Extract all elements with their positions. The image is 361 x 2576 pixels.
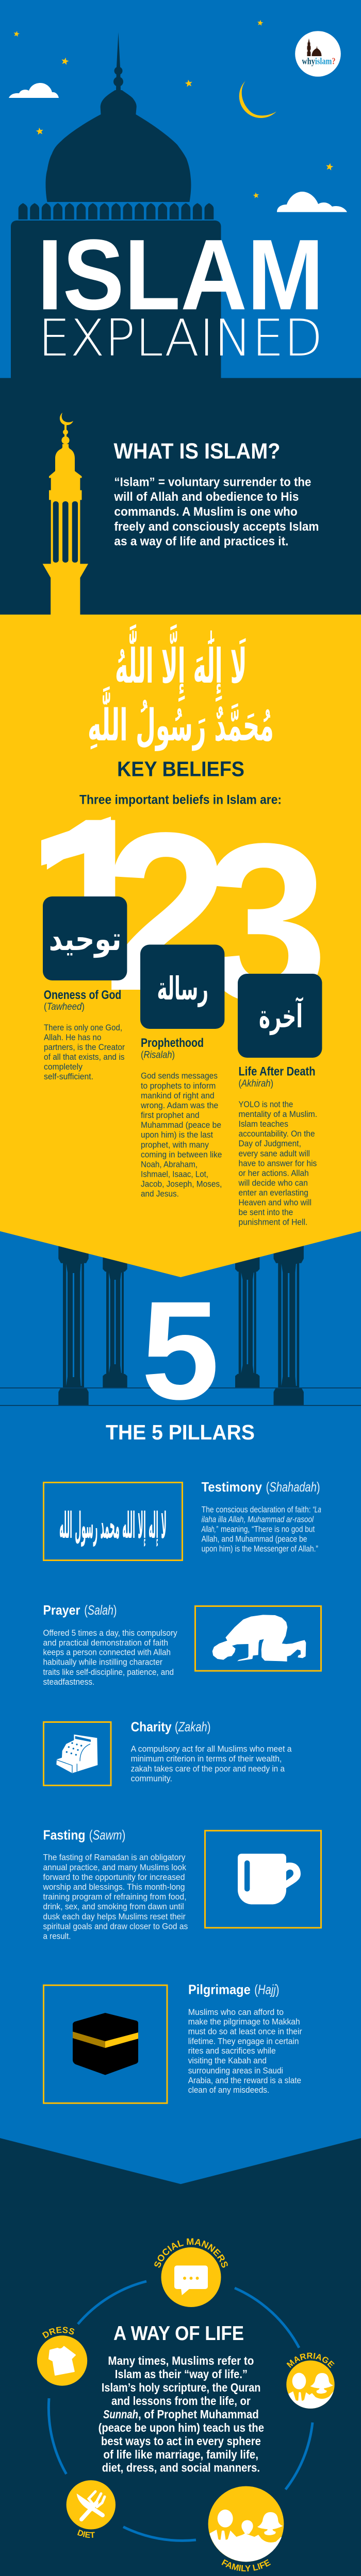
what is islam: text block: “Islam” = voluntary surrender to the [114, 475, 311, 489]
way of life: diet: DIET [77, 2530, 95, 2538]
way of life: dress: DRESS [42, 2327, 74, 2338]
what is islam: text block: as a way of life and practices it. [114, 535, 288, 549]
pillar 4: fasting: annual practice, and many Muslims look [43, 1862, 186, 1872]
way of life: text block: diet, dress, and social manners. [102, 2461, 260, 2474]
pillar 3: charity: zakah takes care of the poor and needy in a [131, 1764, 285, 1773]
belief 2: prophethood: first prophet and [141, 1111, 200, 1120]
belief 3: life after death: (Akhirah) [238, 1078, 273, 1089]
hero: arcade arches [18, 202, 214, 220]
pillar 1: testimony [43, 1479, 321, 1560]
pillar 1: testimony: meaning, “There is no god but [221, 1524, 315, 1534]
pillar 5: pilgrimage [43, 1981, 302, 2103]
pillar 3: charity: community. [131, 1774, 172, 1784]
pillar 5: pilgrimage: make the pilgrimage to Makkah [188, 2017, 300, 2027]
belief 2: prophethood: coming in between like [141, 1150, 222, 1159]
belief 2: prophethood: Noah, Abraham, [141, 1160, 198, 1169]
icon: speech bubble [174, 2265, 208, 2295]
pillar 4: fasting: dusk each day helps Muslims reset their [43, 1911, 186, 1921]
pillar 2: prayer [43, 1602, 321, 1687]
hero: crescent moon [239, 81, 276, 118]
pillar 5: pilgrimage: Arabia, and the reward is a slate [188, 2075, 301, 2085]
pillar 3: charity [43, 1719, 292, 1786]
title: ISLAM: ISLAM [37, 218, 324, 331]
pillar 2: prayer: keeps a person connected with Allah [43, 1648, 171, 1657]
pillar 4: fasting: a result. [43, 1931, 71, 1941]
belief 2: prophethood: to prophets to inform [141, 1081, 216, 1091]
belief 3: life after death: or her actions. Allah [238, 1168, 309, 1178]
key beliefs: yellow panel [0, 615, 361, 1277]
pillar 4: fasting: The fasting of Ramadan is an obligatory [43, 1853, 186, 1862]
pillar 4: fasting: training program of refraining from food, [43, 1892, 187, 1902]
pillar 1: testimony: Allah, and Muhammad (peace be [202, 1534, 307, 1544]
way of life: dress [37, 2327, 88, 2386]
way of life: text block: Islam as their “way of life.” [115, 2367, 248, 2381]
pillar 1: testimony: “La [313, 1504, 321, 1514]
belief 3: life after death: Islam teaches [238, 1120, 288, 1129]
pillar 1: testimony: Testimony [202, 1479, 262, 1495]
pillar 4: fasting: (Sawm) [89, 1827, 125, 1842]
belief 1: oneness of god: (Tawheed) [44, 1002, 85, 1012]
way of life: text block: (peace be upon him) teach us the [99, 2421, 264, 2434]
pillar 3: charity: Charity [131, 1719, 172, 1735]
belief 1: oneness of god: partners, is the Creator [44, 1043, 125, 1052]
key beliefs: big numerals 1 2 3: 2 [104, 785, 229, 1038]
pillar 1: testimony: The conscious declaration of faith: [202, 1504, 311, 1514]
way of life: text block: of life like marriage, family life, [103, 2448, 258, 2461]
belief 2: prophethood: upon him) is the last [141, 1130, 213, 1140]
way of life: diet [66, 2480, 116, 2538]
belief 2: prophethood: Muhammad (peace be [141, 1121, 221, 1130]
way of life: heading: A WAY OF LIFE [113, 2323, 244, 2345]
pillar 4: fasting: worship and blessings. This month-long [43, 1882, 185, 1892]
pillar 5: pilgrimage: surrounding areas in Saudi [188, 2066, 283, 2075]
pillar 4: fasting: spiritual goals and draw closer to God as [43, 1921, 188, 1931]
hero: mosque wall [11, 221, 221, 381]
belief 1: oneness of god: self-sufficient. [44, 1072, 93, 1081]
pillar 5: pilgrimage: (Hajj) [254, 1981, 280, 1997]
pillar 4: fasting [43, 1827, 321, 1941]
hero: mosque dome [45, 32, 191, 202]
belief 3: life after death: be sent into the [238, 1208, 293, 1217]
pillar 1: testimony: ilaha illa Allah, Muhammad ar-rasool [202, 1515, 314, 1524]
belief 1: oneness of god: of all that exists, and is [44, 1053, 125, 1062]
pillar 5: pilgrimage: Pilgrimage [188, 1981, 251, 1997]
pillar 1: testimony: Allah,” [201, 1524, 218, 1534]
belief 2: prophethood: رسالة [157, 970, 208, 1007]
belief 1: oneness of god: توحيد [49, 920, 122, 958]
title: EXPLAINED: EXPLAINED [38, 309, 323, 368]
way of life: social manners [154, 2238, 228, 2307]
what is islam: minaret [43, 413, 88, 615]
icon: cash register [56, 1735, 97, 1773]
pillars: four columns [58, 1236, 304, 1405]
belief 3: life after death: mentality of a Muslim. [238, 1110, 317, 1119]
belief 2: prophethood: Jacob, Joseph, Moses, [141, 1180, 222, 1189]
pillar 1: testimony: (Shahadah) [266, 1479, 320, 1495]
key beliefs: subheading: Three important beliefs in Islam are: [79, 793, 282, 807]
pillar 2: prayer: Offered 5 times a day, this compulsory [43, 1628, 177, 1638]
way of life: ring arcs [48, 2281, 313, 2540]
belief 1: oneness of god: There is only one God, [44, 1023, 122, 1032]
pillar 2: prayer: habitually while instilling character [43, 1657, 162, 1667]
belief 3: life after death: Day of Judgment, [238, 1139, 301, 1148]
belief 2: prophethood: God sends messages [141, 1072, 218, 1081]
pillar 2: prayer: Prayer [43, 1602, 80, 1618]
way of life: family life: FAMILY LIFE [222, 2560, 271, 2572]
belief 2: prophethood: (Risalah) [141, 1050, 175, 1061]
pillars: floor lines [0, 1387, 361, 1406]
belief 1: oneness of god: Allah. He has no [44, 1033, 101, 1042]
way of life: marriage [286, 2352, 335, 2409]
belief 3: life after death: YOLO is not the [238, 1100, 293, 1109]
key beliefs: shahada calligraphy [88, 624, 274, 751]
belief 3: life after death: accountability. On the [238, 1129, 315, 1139]
pillar 5: pilgrimage: visiting the Kabah and [188, 2056, 267, 2065]
pillar 2: prayer: (Salah) [84, 1602, 117, 1618]
belief 3: life after death: Life After Death [238, 1064, 316, 1078]
belief 1: oneness of god: completely [44, 1062, 83, 1072]
pillar 5: pilgrimage: must do so at least once in their [188, 2027, 302, 2036]
belief 2: prophethood: prophet, with many [141, 1140, 209, 1149]
belief 3: life after death: have to answer for his [238, 1159, 317, 1168]
pillar 4: fasting: Fasting [43, 1827, 86, 1842]
belief 1: oneness of god: Oneness of God [44, 988, 121, 1002]
way of life: marriage: MARRIAGE [287, 2352, 335, 2368]
pillar 4: fasting: drink, sex, and smoking from dawn until [43, 1902, 184, 1911]
way of life: text block [99, 2354, 264, 2474]
way of life: text block: Islam’s holy scripture, the Quran [102, 2381, 260, 2394]
belief 3: life after death: Heaven and who will [238, 1198, 311, 1208]
hero: clouds [9, 83, 347, 212]
way of life: family life [208, 2486, 284, 2572]
pillar 2: prayer: and practical demonstration of faith [43, 1638, 168, 1648]
belief 2: prophethood: mankind of right and [141, 1091, 215, 1100]
pillar 3: charity: (Zakah) [175, 1719, 210, 1735]
pillars: heading: THE 5 PILLARS [106, 1420, 255, 1444]
hero: whyislam logo: whyislam? [302, 56, 335, 66]
pillar 1: testimony: upon him) is the Messenger of Allah.” [202, 1544, 318, 1554]
belief 3: life after death: punishment of Hell. [238, 1218, 307, 1227]
what is islam: text block: will of Allah and obedience to His [113, 490, 299, 504]
pillar 2: prayer: steadfastness. [43, 1677, 95, 1687]
pillar 3: charity: A compulsory act for all Muslims who meet a [131, 1744, 292, 1754]
pillar 5: pilgrimage: Muslims who can afford to [188, 2007, 284, 2017]
pillar 2: prayer: traits like self-discipline, patience, and [43, 1667, 174, 1677]
icon: person prostrating [212, 1615, 306, 1662]
icon: mug [238, 1854, 301, 1904]
pillar 5: pilgrimage: rites and sacrifices while [188, 2046, 276, 2056]
belief 3: life after death [238, 974, 322, 1227]
what is islam: text block [113, 475, 319, 549]
belief 1: oneness of god [43, 896, 127, 1081]
icon: family [209, 2510, 283, 2562]
pillar 4: fasting: forward to the opportunity for increased [43, 1872, 185, 1882]
hero: whyislam logo [295, 31, 341, 77]
belief 2: prophethood: and Jesus. [141, 1190, 179, 1199]
key beliefs: big numerals 1 2 3 [31, 771, 329, 1048]
icon: fork and knife [77, 2492, 105, 2519]
belief 2: prophethood [140, 945, 224, 1199]
what is islam: text block: commands. A Muslim is one who [114, 505, 298, 519]
icon: shirt [49, 2347, 75, 2375]
belief 3: life after death: enter an everlasting [238, 1188, 308, 1197]
pillar 5: pilgrimage: lifetime. They engage in certain [188, 2036, 299, 2046]
pillars: big numeral 5: 5 [141, 1272, 219, 1429]
way of life: text block: , of Prophet Muhammad [138, 2408, 259, 2421]
key beliefs: big numerals 1 2 3: 1 [31, 771, 157, 1023]
belief 2: prophethood: Ishmael, Isaac, Lot, [141, 1170, 208, 1179]
belief 2: prophethood: wrong. Adam was the [140, 1101, 218, 1110]
pillar 5: pilgrimage: clean of any misdeeds. [188, 2085, 269, 2095]
way of life: text block: Many times, Muslims refer to [108, 2354, 254, 2367]
belief 3: life after death: every sane adult will [238, 1149, 310, 1158]
what is islam: heading: WHAT IS ISLAM? [113, 439, 281, 464]
key beliefs: big numerals 1 2 3: 3 [203, 796, 329, 1048]
belief 2: prophethood: Prophethood [141, 1036, 204, 1050]
belief 3: life after death: will decide who can [238, 1178, 308, 1188]
pillar 3: charity: minimum criterion in terms of their wealth, [131, 1754, 282, 1764]
way of life: text block: Sunnah [103, 2408, 138, 2421]
belief 3: life after death: آخرة [259, 996, 303, 1035]
way of life: social manners: SOCIAL MANNERS [154, 2238, 228, 2268]
key beliefs: heading: KEY BELIEFS [117, 757, 244, 781]
way of life: text block: and lessons from the life, or [111, 2394, 251, 2408]
what is islam: text block: freely and consciously accepts Islam [114, 520, 319, 534]
way of life: text block: best ways to act in every sphere [101, 2434, 261, 2448]
icon: kaaba [73, 2013, 138, 2075]
hero: stars [13, 20, 334, 198]
icon: bride and groom [288, 2373, 334, 2409]
